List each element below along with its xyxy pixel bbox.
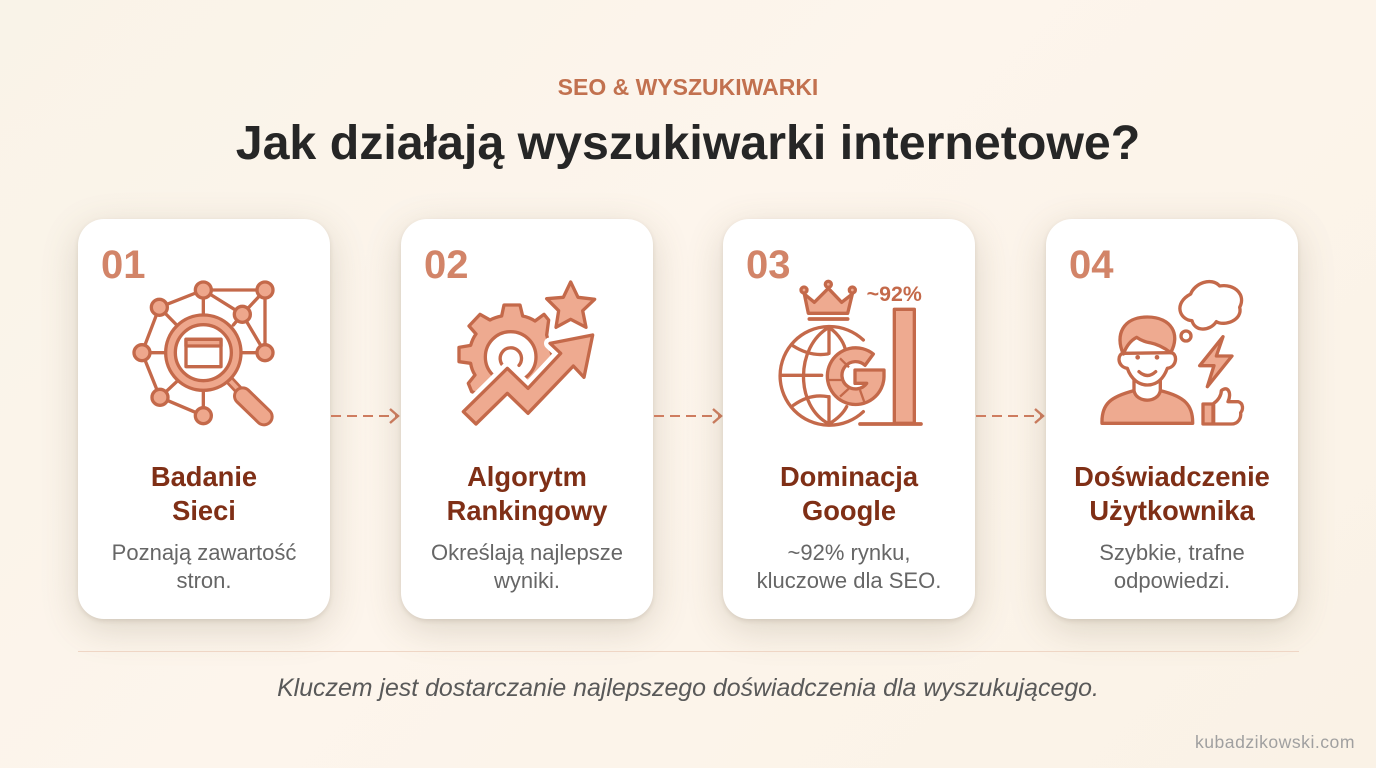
card description: ~92% rynku, (788, 540, 910, 565)
card description: Poznają zawartość (112, 540, 296, 565)
step number: 01 (101, 243, 146, 287)
panel: card 02 (401, 219, 653, 619)
card description: Określają najlepsze (431, 540, 623, 565)
arrow 2 (654, 408, 723, 424)
panel: card 03 (723, 219, 975, 619)
card heading (447, 461, 608, 526)
card heading: Badanie (151, 461, 257, 492)
icon: network magnifier (132, 280, 275, 426)
card description (1099, 540, 1245, 593)
icon: crown, globe, G, bar (778, 280, 923, 427)
watermark: kubadzikowski.com (1195, 732, 1355, 752)
icon: crown, globe, G, bar: ~92% (867, 282, 922, 306)
card description: stron. (176, 568, 232, 593)
footer takeaway: Kluczem jest dostarczanie najlepszego doświadczenia dla wyszukującego. (277, 674, 1099, 702)
step number: 03 (746, 243, 790, 287)
card heading: Doświadczenie (1074, 461, 1270, 492)
icon: user, thought, bolt, thumb (1100, 280, 1244, 426)
card heading: Sieci (172, 495, 236, 526)
card heading: Google (802, 495, 896, 526)
card description (112, 540, 296, 593)
panel: card 04 (1046, 219, 1298, 619)
title: Jak działają wyszukiwarki internetowe? (236, 116, 1140, 170)
card heading (1074, 461, 1270, 526)
step number: 02 (424, 243, 468, 287)
card heading: Algorytm (467, 461, 587, 492)
card heading: Rankingowy (447, 495, 607, 526)
card description: kluczowe dla SEO. (757, 568, 941, 593)
card description (431, 540, 623, 593)
card heading: Dominacja (780, 461, 918, 492)
icon: gear, star, rising arrow (457, 280, 596, 426)
arrow 3 (976, 408, 1045, 424)
step number: 04 (1069, 243, 1114, 287)
card description (757, 540, 941, 593)
card description: wyniki. (494, 568, 560, 593)
card heading (151, 461, 257, 526)
card heading: Użytkownika (1089, 495, 1255, 526)
card heading (780, 461, 918, 526)
eyebrow label: SEO & WYSZUKIWARKI (558, 74, 818, 100)
card description: odpowiedzi. (1114, 568, 1230, 593)
arrow 1 (331, 408, 400, 424)
card description: Szybkie, trafne (1099, 540, 1245, 565)
panel: card 01 (78, 219, 330, 619)
